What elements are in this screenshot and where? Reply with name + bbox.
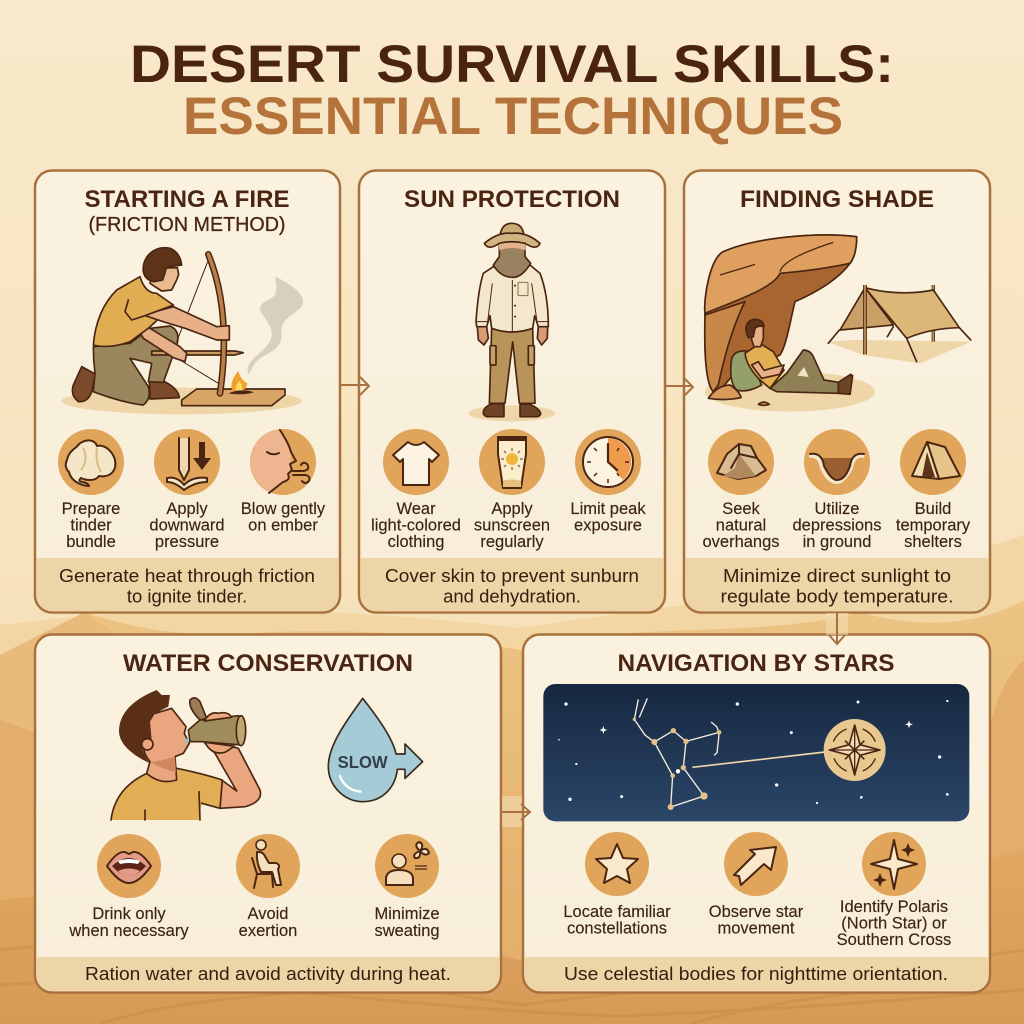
label: apply downward pressure: pressure [155, 533, 219, 551]
label: apply sunscreen regularly: Apply [491, 500, 533, 518]
icon: clock peak exposure [575, 429, 641, 495]
icon: sparkle polaris [862, 832, 926, 896]
illustration: person drinking from canteen [111, 690, 261, 820]
illustration: clothed person with hat [468, 223, 555, 421]
caption: sun: and dehydration. [443, 586, 581, 606]
label: apply sunscreen regularly: sunscreen [474, 516, 550, 534]
arrow: sun to shade [664, 378, 693, 396]
heading: finding shade: FINDING SHADE [740, 186, 934, 213]
panel: finding shade [684, 170, 990, 612]
title: ESSENTIAL TECHNIQUES [183, 87, 843, 146]
label: prepare tinder bundle: bundle [66, 533, 116, 551]
label: minimize sweating: sweating [374, 922, 440, 940]
label: avoid exertion: Avoid [248, 905, 288, 923]
icon: arrow for star movement [724, 832, 788, 896]
label: observe star movement: Observe star [709, 903, 804, 921]
icon: tent [900, 429, 966, 495]
label: apply downward pressure: downward [149, 516, 225, 534]
title [130, 35, 894, 146]
heading: water conservation: WATER CONSERVATION [123, 650, 413, 677]
label: build temporary shelters: shelters [904, 533, 962, 551]
icon: ground depression [804, 429, 870, 495]
illustration: slow water drop: SLOW [338, 752, 388, 772]
caption: shade: regulate body temperature. [720, 586, 954, 606]
caption: shade: Minimize direct sunlight to [723, 565, 951, 586]
arrow: fire to sun [339, 377, 369, 395]
label: limit peak exposure: Limit peak [570, 500, 646, 518]
label: identify polaris or southern cross: Identify Polaris [840, 898, 948, 916]
label: drink only when necessary: Drink only [92, 905, 166, 923]
label: drink only when necessary: when necessary [68, 922, 189, 940]
chart: night sky with constellation and compass [543, 684, 969, 821]
label: wear light-colored clothing: light-colored [371, 516, 461, 534]
label: wear light-colored clothing: clothing [388, 533, 444, 551]
label: identify polaris or southern cross: Southern Cross [837, 931, 951, 949]
label: utilize depressions in ground: Utilize [815, 500, 859, 518]
label: seek natural overhangs: Seek [722, 500, 761, 518]
arrow: water to navigation [500, 796, 530, 827]
icon: blow on ember [250, 429, 316, 495]
label: blow gently on ember: on ember [248, 516, 318, 534]
label: wear light-colored clothing: Wear [396, 500, 436, 518]
label: utilize depressions in ground: depressions [793, 516, 881, 534]
heading: starting a fire: (FRICTION METHOD) [88, 214, 286, 236]
panel: navigation by stars [523, 634, 990, 992]
panel: sun protection [359, 170, 665, 612]
label: seek natural overhangs: overhangs [702, 533, 780, 551]
panel: starting a fire [35, 170, 340, 612]
label: prepare tinder bundle: Prepare [62, 500, 120, 518]
label: minimize sweating: Minimize [374, 905, 440, 923]
label: prepare tinder bundle: tinder [70, 516, 112, 534]
label: build temporary shelters: Build [915, 500, 951, 518]
illustration: rock overhang and tarp shelter [705, 235, 972, 412]
caption: fire: Generate heat through friction [59, 565, 315, 586]
label: build temporary shelters: temporary [896, 516, 971, 534]
icon: tinder bundle [58, 429, 124, 495]
label: locate familiar constellations: constellations [567, 920, 667, 938]
heading: starting a fire [84, 186, 290, 236]
label: avoid exertion: exertion [239, 922, 297, 940]
caption: fire: to ignite tinder. [127, 586, 247, 606]
arrow: shade to navigation [826, 612, 848, 644]
heading: starting a fire: STARTING A FIRE [84, 186, 290, 213]
panel: water conservation [35, 634, 501, 992]
label: utilize depressions in ground: in ground [803, 533, 871, 551]
label: observe star movement: movement [717, 920, 795, 938]
icon: natural overhang rock [708, 429, 774, 495]
heading: navigation by stars: NAVIGATION BY STARS [618, 650, 894, 677]
icon: light-colored shirt [383, 429, 449, 495]
label: apply downward pressure: Apply [166, 500, 208, 518]
label: blow gently on ember: Blow gently [241, 500, 326, 518]
caption: navigation: Use celestial bodies for nighttime orientation. [564, 963, 948, 984]
illustration: slow water drop [328, 698, 423, 802]
caption: water: Ration water and avoid activity during heat. [85, 963, 451, 984]
icon: person with fan [375, 834, 439, 898]
illustration: person using bow drill [62, 248, 303, 414]
icon: mouth [97, 834, 161, 898]
icon: seated person [236, 834, 300, 898]
title: DESERT SURVIVAL SKILLS: [130, 35, 894, 94]
heading: sun protection: SUN PROTECTION [404, 186, 620, 213]
caption: sun: Cover skin to prevent sunburn [385, 565, 639, 586]
label: identify polaris or southern cross: (North Star) or [841, 914, 947, 932]
icon: downward pressure [154, 429, 220, 495]
label: seek natural overhangs: natural [716, 516, 766, 534]
icon: star [585, 832, 649, 896]
icon: sunscreen tube [479, 429, 545, 495]
label: locate familiar constellations: Locate familiar [563, 903, 671, 921]
label: limit peak exposure: exposure [574, 516, 642, 534]
label: apply sunscreen regularly: regularly [480, 533, 544, 551]
